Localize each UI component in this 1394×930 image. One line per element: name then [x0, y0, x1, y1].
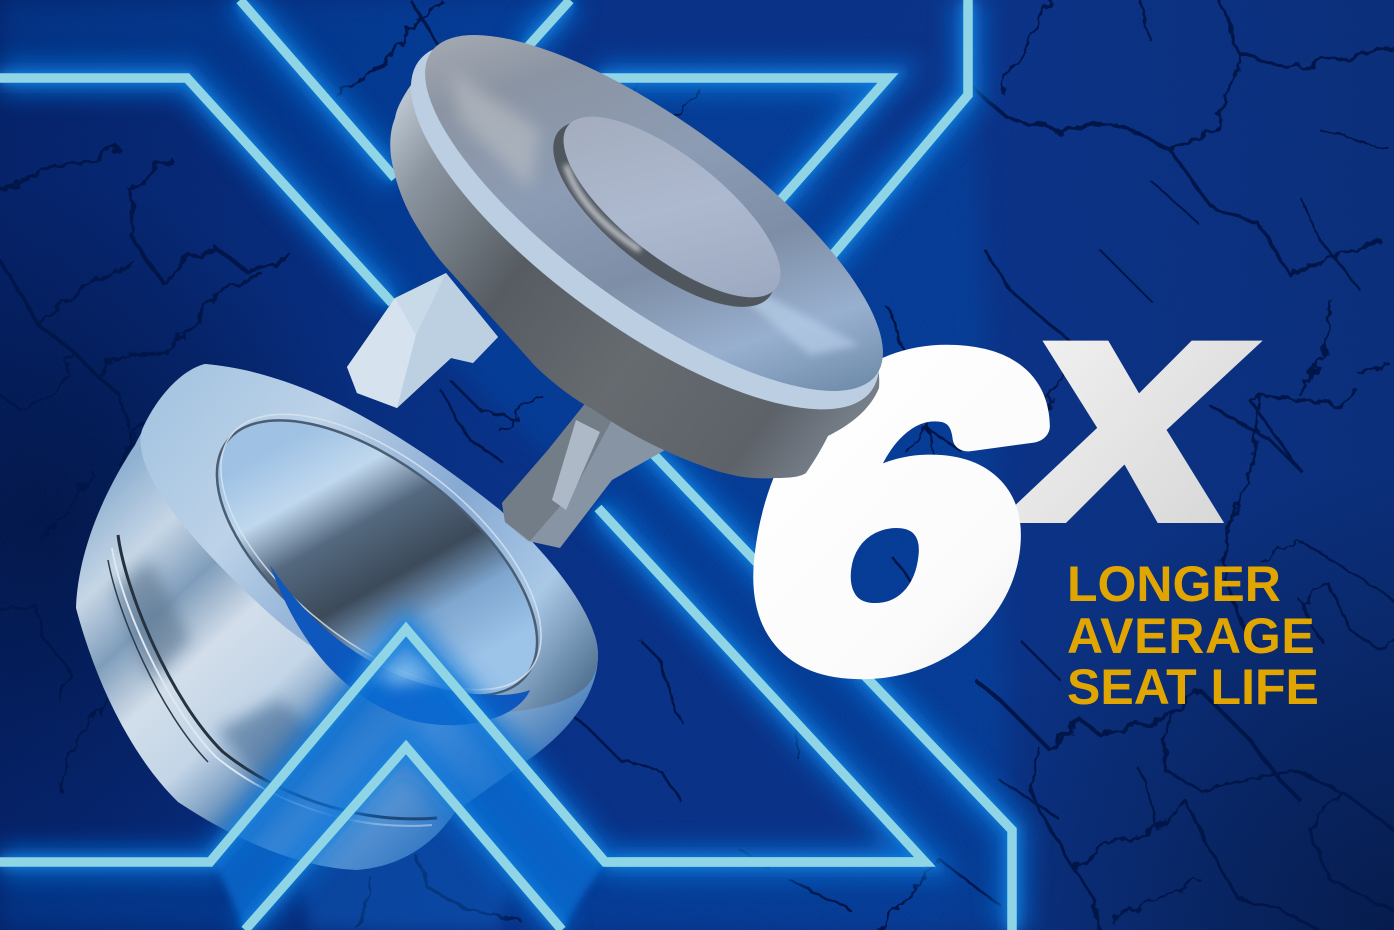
boss shadow base	[525, 89, 803, 339]
background visible through the ring	[270, 565, 530, 725]
neon line strokes	[0, 0, 1012, 930]
ring rim highlight	[175, 363, 587, 741]
ring inner wall	[171, 369, 583, 747]
ring inner rim	[171, 369, 583, 747]
numeral 6: 6	[728, 272, 1050, 752]
ring outer body	[76, 364, 598, 870]
lower chevron wash	[300, 760, 510, 930]
valve disc	[360, 0, 931, 478]
disc chamfer band	[360, 0, 930, 471]
ring grooves	[118, 535, 437, 819]
caption: longer average seat life: LONGER	[1067, 556, 1281, 612]
chevron strokes	[0, 629, 925, 930]
disc radial sheen	[720, 270, 860, 355]
upper leg	[347, 273, 498, 408]
disc side wall	[390, 37, 879, 478]
big number 6x	[728, 220, 1254, 752]
dark reflection on ring lower wall	[215, 700, 330, 790]
boss highlight rim	[566, 165, 640, 250]
boss top face	[537, 86, 807, 328]
superscript x: x	[1006, 220, 1254, 589]
disc left sheen	[450, 70, 540, 190]
caption: longer average seat life: AVERAGE	[1067, 608, 1315, 664]
ring top face	[140, 364, 598, 712]
light glow at chevron peak	[360, 622, 455, 685]
neon chevrons over the ring	[0, 629, 925, 930]
valve guide legs	[347, 273, 665, 548]
blue glow washing over ring	[214, 634, 605, 928]
neon X outline behind the valve	[0, 0, 1012, 930]
dark reflection on ring wall	[115, 560, 190, 680]
valve seat ring	[76, 363, 598, 870]
disc top face	[377, 0, 931, 449]
caption: longer average seat life: SEAT LIFE	[1067, 659, 1319, 715]
lower leg	[502, 395, 665, 548]
